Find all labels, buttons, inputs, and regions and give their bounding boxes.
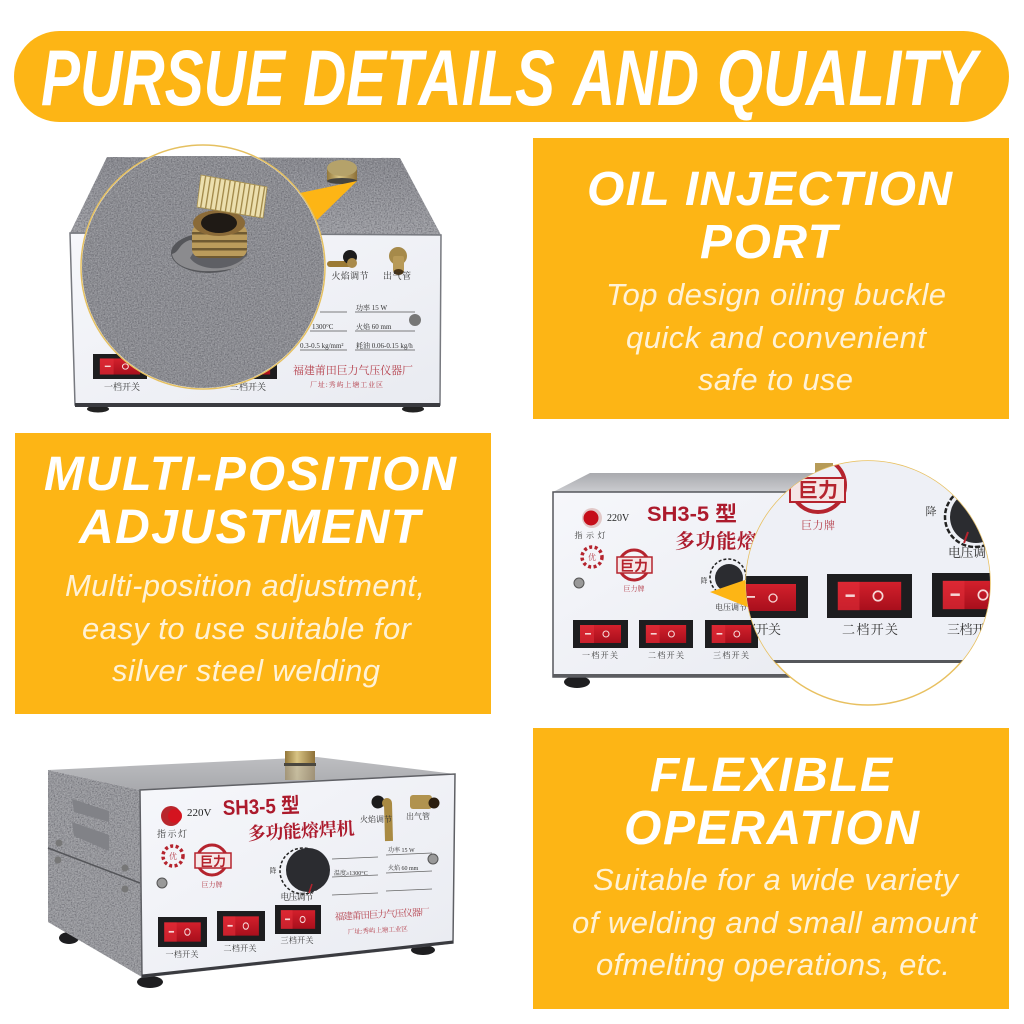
panel: oil injection port: quick and convenient [626, 320, 927, 355]
icon: oil hole [171, 233, 248, 273]
voltage label: 电压调节 [280, 891, 314, 902]
enlarged switches [740, 576, 808, 618]
title banner: DETAILS [303, 33, 555, 122]
icon: quality badge [163, 846, 183, 866]
icon: screw [574, 578, 584, 588]
logo [195, 845, 231, 889]
zoom circle: switches: 三档开 [947, 622, 985, 637]
icon: quality badge: 优 [588, 552, 596, 562]
zoom circle: switches [745, 460, 991, 706]
icon: voltage knob enlarged [944, 495, 984, 548]
product photo: bottom machine: 出气管 [406, 811, 430, 821]
product photo: top machine with oil port zoom: 1300°C [312, 323, 334, 331]
zoom circle: switches: 降 [926, 504, 936, 518]
product photo: bottom machine: 指示灯 [157, 828, 187, 839]
logo enlarged [790, 458, 845, 532]
panel: multi-position adjustment: Multi-position adjustment, [65, 568, 425, 603]
product photo: bottom machine: 降 [270, 866, 276, 875]
product photo: bottom machine: 火焰 60 mm [388, 864, 419, 872]
panel: flexible operation: Suitable for a wide variety [593, 862, 960, 897]
product photo: bottom machine: 火焰调节 [360, 814, 392, 824]
icon: brass filler cap [284, 751, 316, 780]
icon: flame adjuster lever [327, 250, 357, 268]
product photo: bottom machine: 一档开关 [166, 949, 198, 959]
logo enlarged: 巨力 [798, 474, 838, 503]
icon: flame valve [372, 796, 392, 841]
icon: gas outlet [410, 795, 440, 809]
zoom circle: switches: 档开关 [743, 622, 781, 637]
product photo: bottom machine: 福建莆田巨力气压仪器厂 [335, 906, 431, 923]
icon: indicator lamp [582, 508, 602, 528]
panel: flexible operation: of welding and small amount [572, 905, 978, 940]
product photo: bottom machine: 三档开关 [280, 935, 314, 945]
product photo: top machine with oil port zoom: 厂址:秀屿上塘工业区 [310, 380, 383, 389]
panel: oil injection port: Top design oiling buckle [606, 277, 946, 312]
product photo: top machine with oil port zoom: 0.3-0.5 kg/mm² [300, 342, 344, 350]
logo enlarged: 巨力牌 [801, 518, 835, 532]
panel: multi-position adjustment: easy to use suitable for [82, 611, 413, 646]
icon: voltage knob [710, 559, 746, 595]
product photo: middle machine with switch zoom: 多功能熔 [675, 530, 757, 553]
product photo: middle machine with switch zoom: SH3-5 型 [647, 503, 737, 526]
icon: quality badge [582, 547, 602, 567]
zoom circle: switches: 电压调 [948, 545, 986, 560]
product photo: top machine with oil port zoom: 火焰 60 mm [356, 322, 392, 331]
panel: multi-position adjustment: silver steel welding [112, 653, 380, 688]
product photo: middle machine with switch zoom [553, 455, 1017, 705]
panel: flexible operation: FLEXIBLE [650, 749, 894, 802]
logo [617, 550, 652, 593]
specification lines [300, 312, 415, 350]
zoom circle: oil port [81, 145, 325, 389]
product photo: bottom machine: 温度≥1300°C [334, 869, 368, 877]
product photo: middle machine with switch zoom: 三档开关 [713, 650, 749, 660]
product photo: top machine with oil port zoom: 耗油 0.06-0.15 kg/h [356, 341, 413, 350]
callout pointer [300, 181, 357, 220]
icon: voltage knob [280, 848, 330, 894]
product photo: top machine with oil port zoom: 功率 15 W [356, 303, 387, 312]
product photo: top machine with oil port zoom [70, 145, 441, 412]
callout pointer [710, 580, 750, 608]
title banner [14, 31, 1009, 122]
product photo: middle machine with switch zoom: 二档开关 [648, 650, 684, 660]
title banner: PURSUE [41, 33, 287, 122]
product photo: top machine with oil port zoom: 一档开关 [104, 381, 140, 392]
zoom circle: switches: 二档开关 [842, 622, 898, 637]
product photo: top machine with oil port zoom: 三档开关 [230, 381, 266, 392]
product photo: middle machine with switch zoom: 220V [607, 513, 630, 524]
product photo: top machine with oil port zoom: 出气管 [383, 270, 411, 281]
icon: quality badge: 优 [169, 851, 177, 861]
panel: multi-position adjustment [15, 433, 491, 714]
panel: multi-position adjustment: ADJUSTMENT [78, 501, 424, 554]
product photo: top machine with oil port zoom: 福建莆田巨力气压仪器厂 [293, 363, 413, 377]
icon: knurled cap [197, 175, 267, 218]
panel: oil injection port: OIL INJECTION [587, 163, 953, 216]
product photo: bottom machine [48, 751, 455, 988]
panel: multi-position adjustment: MULTI-POSITION [44, 448, 457, 501]
icon: gas outlet [389, 247, 407, 275]
icon: indicator lamp [161, 806, 182, 826]
product photo: middle machine with switch zoom: 一档开关 [582, 650, 618, 660]
product photo: bottom machine: 多功能熔焊机 [247, 817, 355, 844]
panel: oil injection port: PORT [700, 216, 841, 269]
icon: threaded neck [192, 210, 247, 258]
logo: 巨力 [200, 851, 226, 870]
icon: brass cap [327, 160, 357, 184]
panel: flexible operation: OPERATION [624, 802, 920, 855]
panel: flexible operation: ofmelting operations, etc. [596, 947, 950, 982]
specification lines [332, 853, 432, 895]
product photo: bottom machine: 220V [187, 807, 212, 819]
panel: oil injection port: safe to use [698, 362, 853, 397]
product photo: top machine with oil port zoom: 火焰调节 [332, 270, 368, 281]
product photo: middle machine with switch zoom: 电压调节 [715, 602, 747, 612]
logo: 巨力 [620, 556, 648, 576]
panel: oil injection port [533, 138, 1009, 419]
panel: flexible operation [533, 728, 1009, 1009]
product photo: bottom machine: SH3-5 型 [222, 794, 300, 820]
logo: 巨力牌 [624, 584, 644, 593]
product photo: bottom machine: 二档开关 [224, 943, 256, 953]
product photo: bottom machine: 功率 15 W [388, 846, 415, 854]
product photo: middle machine with switch zoom: 降 [700, 576, 708, 585]
product photo: bottom machine: 厂址:秀屿上塘工业区 [348, 924, 409, 936]
product photo: middle machine with switch zoom: 指示灯 [574, 530, 606, 540]
title banner: AND [572, 33, 699, 122]
logo: 巨力牌 [202, 880, 222, 889]
